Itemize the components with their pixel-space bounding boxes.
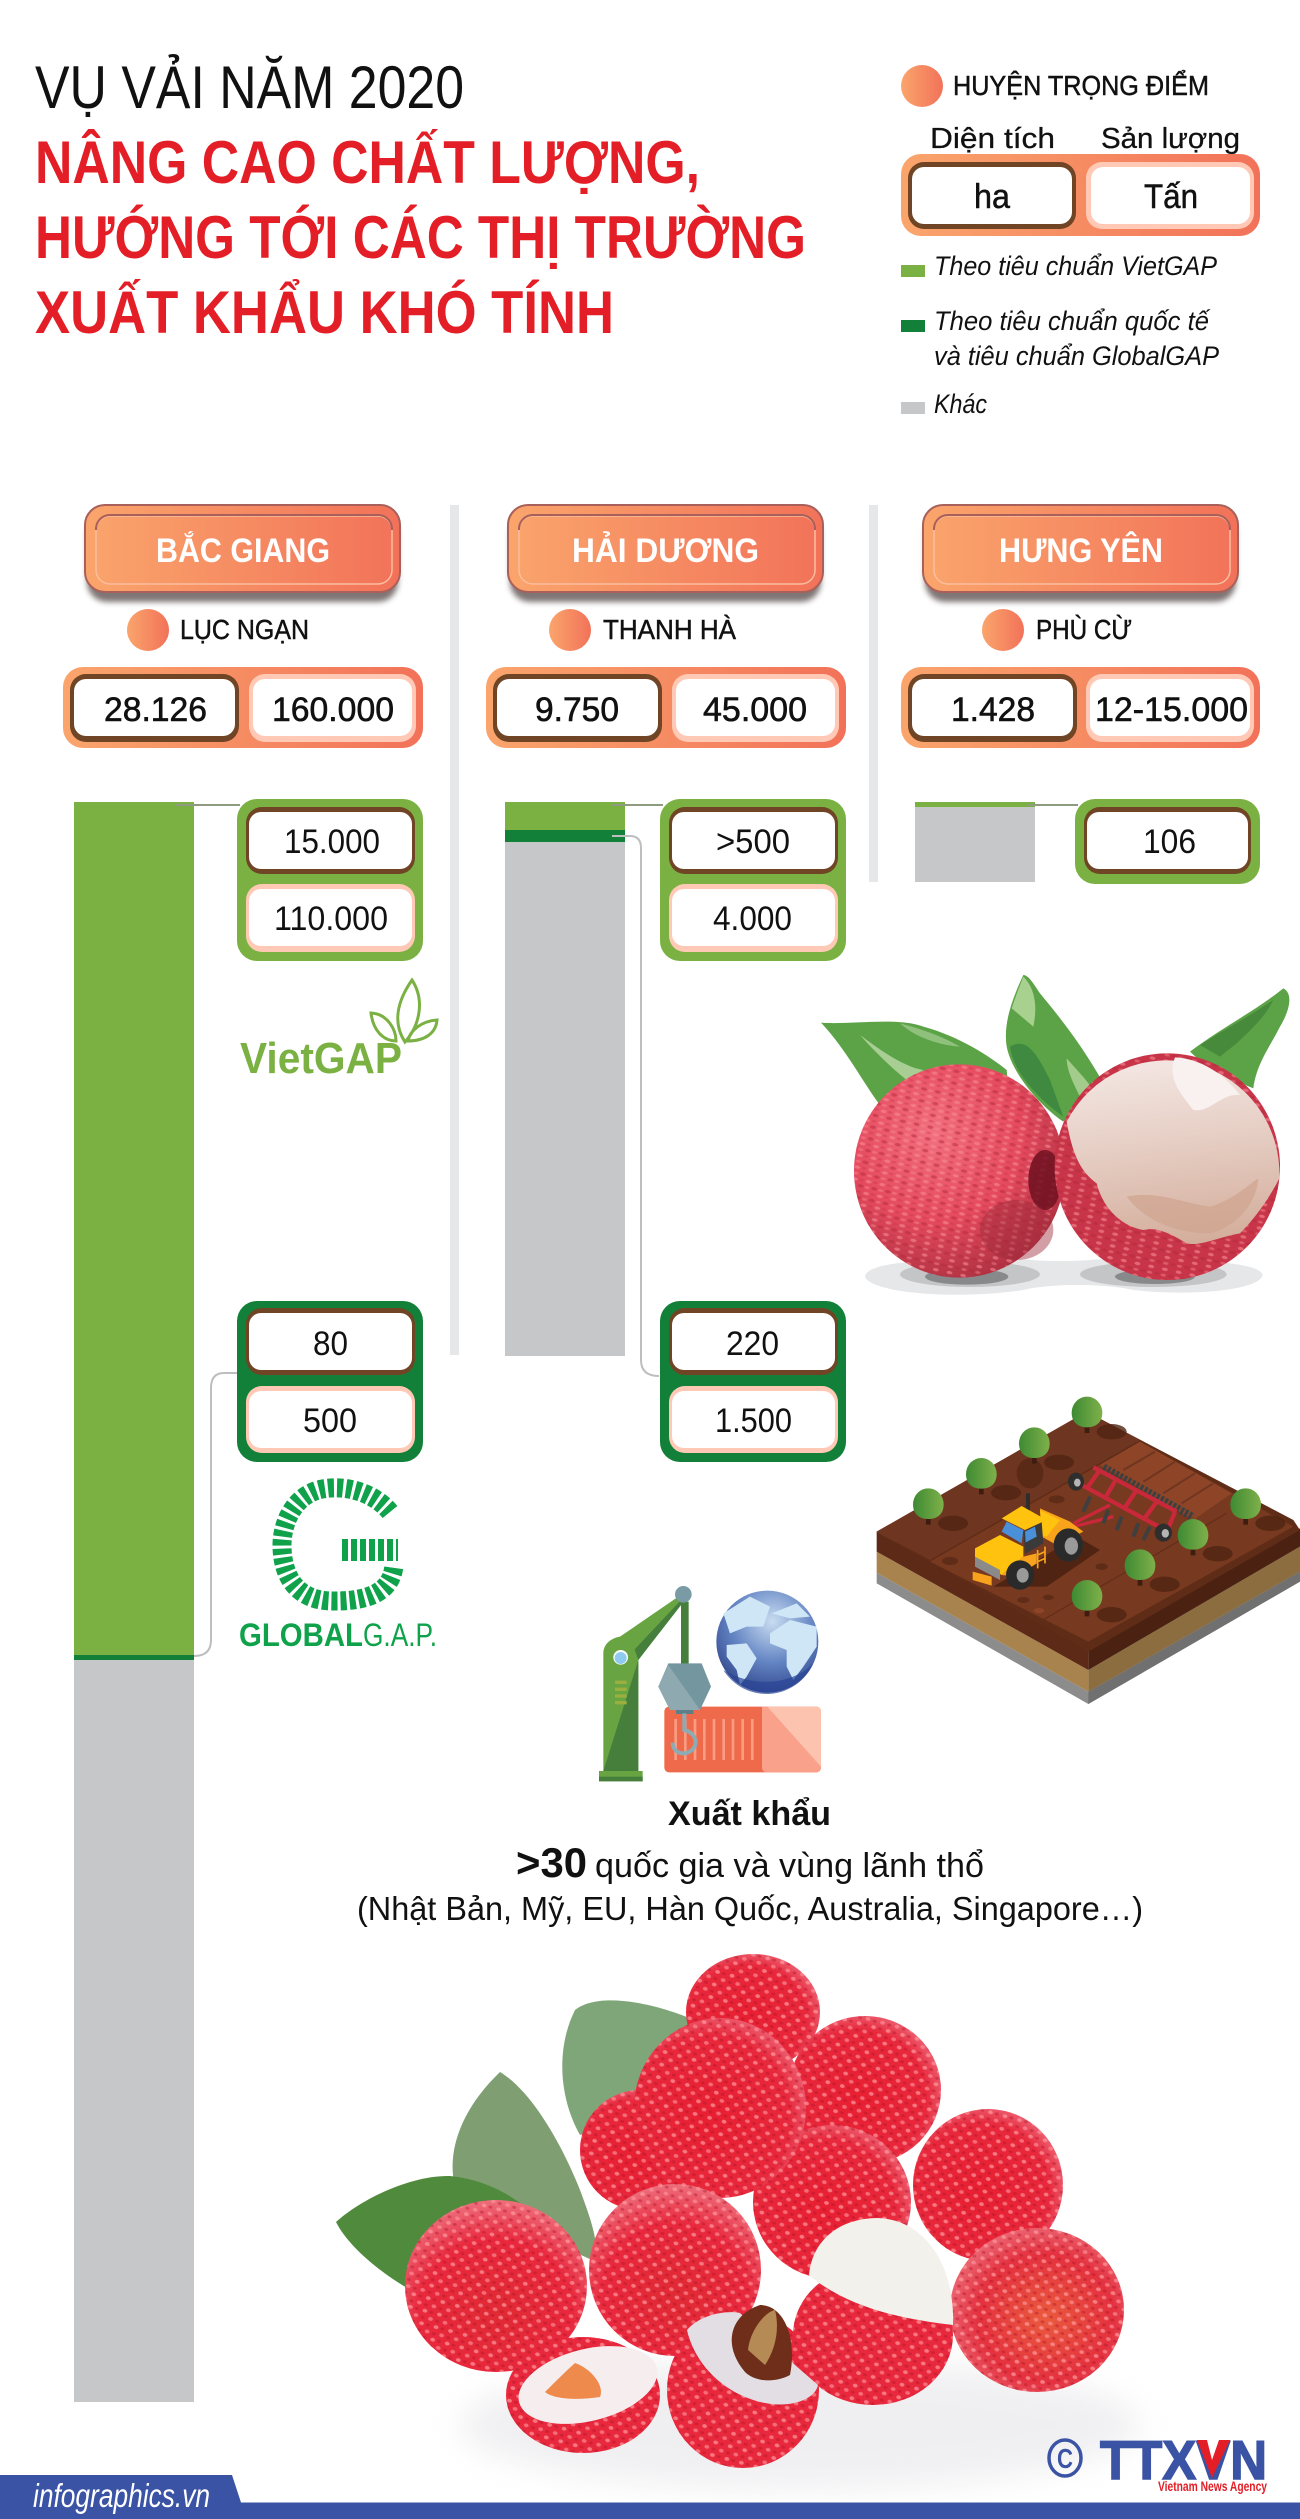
open half lychee	[506, 2333, 666, 2453]
logo: GlobalG.A.P.	[239, 1488, 437, 1653]
totals pill: 9.750	[535, 691, 619, 729]
legend	[901, 65, 1260, 419]
stacked bar	[74, 802, 194, 2402]
VietGAP values: 15.000	[284, 823, 380, 861]
illustration: lychee pile	[336, 1954, 1140, 2490]
export count: quốc gia và vùng lãnh thổ	[595, 1847, 984, 1885]
stacked bar	[915, 802, 1035, 882]
GlobalGAP values	[237, 1301, 423, 1462]
crane	[599, 1586, 711, 1781]
district: THANH HÀ	[603, 614, 737, 645]
title line 4: XUẤT KHẨU KHÓ TÍNH	[35, 279, 614, 346]
VietGAP values: >500	[716, 823, 790, 861]
peeled lychee	[1055, 1053, 1280, 1280]
logo: GlobalG.A.P.: G.A.P.	[363, 1617, 437, 1653]
VietGAP values: 4.000	[713, 900, 792, 938]
illustration: two lychees with leaves	[821, 975, 1289, 1295]
copyright mark	[1049, 2440, 1081, 2476]
export markets: (Nhật Bản, Mỹ, EU, Hàn Quốc, Australia, Singapore…)	[357, 1890, 1143, 1927]
whole lychee	[854, 1064, 1065, 1278]
export text	[357, 1795, 1143, 1927]
ground shadow	[460, 2360, 1140, 2490]
legend: unit pill: ha	[974, 178, 1010, 216]
district	[549, 609, 737, 651]
connector: GlobalGAP	[194, 1373, 237, 1656]
legend: unit pill	[901, 154, 1260, 236]
totals pill	[901, 667, 1260, 748]
footer band	[0, 2475, 1300, 2519]
copyright mark: C	[1057, 2443, 1073, 2474]
export count: >30	[516, 1839, 587, 1886]
legend: international standard	[901, 306, 1219, 371]
province button	[508, 505, 823, 602]
VietGAP value	[1075, 799, 1260, 884]
export heading: Xuất khẩu	[668, 1795, 831, 1833]
shadow	[865, 1259, 1263, 1295]
logo: TTXVN	[1049, 2429, 1267, 2494]
GlobalGAP values: 220	[726, 1325, 779, 1363]
footer	[0, 2475, 1300, 2519]
province button	[923, 505, 1238, 602]
province button: HƯNG YÊN	[999, 532, 1163, 570]
legend: column labels: Diện tích	[930, 123, 1055, 155]
legend: international standard: và tiêu chuẩn GlobalGAP	[934, 341, 1219, 371]
connector: VietGAP	[1028, 804, 1078, 806]
export count	[516, 1839, 984, 1886]
VietGAP value: 106	[1143, 823, 1196, 861]
peeled lychee	[793, 2218, 953, 2405]
illustration: farm with tractor	[877, 1397, 1300, 1704]
logo: GlobalG.A.P.: GLOBAL	[239, 1617, 363, 1653]
legend: unit pill: Tấn	[1144, 178, 1198, 216]
GlobalGAP values: 1.500	[715, 1402, 792, 1440]
legend: column labels: Sản lượng	[1101, 123, 1240, 155]
globe	[716, 1591, 818, 1694]
title line 3: HƯỚNG TỚI CÁC THỊ TRƯỜNG	[35, 204, 806, 271]
icon: export crane, container and globe	[599, 1586, 821, 1781]
legend: district marker	[901, 65, 1209, 107]
legend: international standard: Theo tiêu chuẩn quốc tế	[934, 306, 1211, 336]
totals pill: 45.000	[703, 691, 807, 729]
container	[664, 1707, 821, 1772]
totals pill: 12-15.000	[1095, 691, 1248, 729]
legend: VietGAP: Theo tiêu chuẩn VietGAP	[934, 251, 1217, 281]
connector: VietGAP	[612, 804, 663, 806]
tractor	[973, 1493, 1083, 1590]
stacked bar	[505, 802, 625, 1356]
title line 1: VỤ VẢI NĂM 2020	[35, 54, 464, 121]
leaves	[821, 975, 1289, 1122]
implement	[1068, 1467, 1193, 1542]
GlobalGAP values: 500	[303, 1402, 357, 1440]
province button: BẮC GIANG	[156, 532, 330, 570]
district: PHÙ CỪ	[1036, 614, 1132, 645]
logo: VietGAP	[240, 980, 437, 1083]
halved lychee with seed	[667, 2305, 819, 2468]
VietGAP values	[237, 799, 423, 961]
title line 2: NÂNG CAO CHẤT LƯỢNG,	[35, 129, 700, 196]
VietGAP values	[660, 799, 846, 961]
agency letters: TTXVN	[1100, 2429, 1267, 2491]
footer website: infographics.vn	[33, 2477, 210, 2514]
connector: VietGAP	[176, 804, 240, 806]
district	[982, 609, 1132, 651]
legend: district marker: HUYỆN TRỌNG ĐIỂM	[953, 70, 1209, 101]
legend: other: Khác	[934, 389, 987, 419]
leaves	[336, 2000, 694, 2295]
totals pill	[486, 667, 846, 748]
connector: GlobalGAP	[612, 836, 659, 1376]
VietGAP values: 110.000	[274, 900, 388, 938]
panel: Hưng Yên	[901, 505, 1260, 884]
province button: HẢI DƯƠNG	[572, 532, 759, 570]
soil block	[877, 1412, 1300, 1704]
totals pill	[63, 667, 423, 748]
totals pill: 28.126	[104, 691, 207, 729]
GlobalGAP values	[660, 1301, 846, 1462]
legend: other	[901, 389, 987, 419]
district: LỤC NGẠN	[180, 614, 309, 645]
panel: Bắc Giang	[63, 505, 437, 2402]
whole lychees	[405, 1954, 1124, 2392]
GlobalGAP values: 80	[313, 1325, 348, 1363]
totals pill: 1.428	[951, 691, 1035, 729]
logo: VietGAP: VietGAP	[240, 1034, 402, 1083]
totals pill: 160.000	[272, 691, 394, 729]
trees	[913, 1397, 1285, 1622]
province button	[85, 505, 400, 602]
district	[127, 609, 309, 651]
panel: Hải Dương	[486, 505, 846, 1462]
legend: column labels	[930, 123, 1240, 155]
title	[35, 54, 806, 346]
